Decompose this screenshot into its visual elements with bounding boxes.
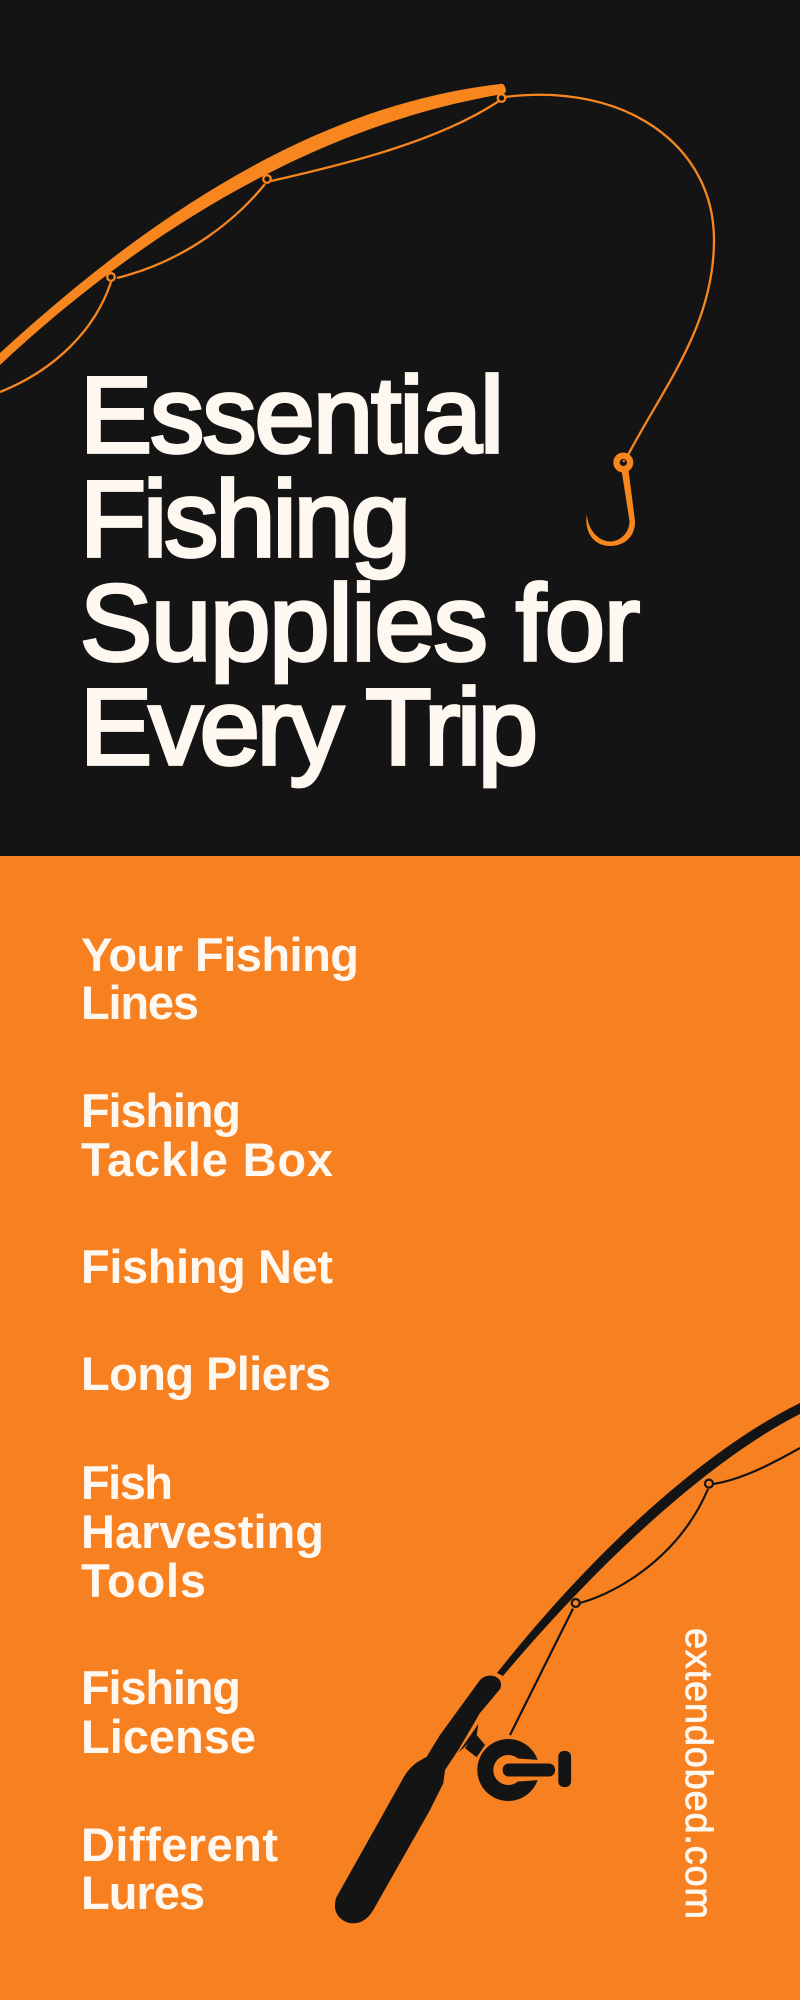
title: Every Trip	[80, 666, 538, 787]
fishing line through guides	[0, 94, 714, 455]
reel	[458, 1724, 571, 1801]
list item: different lures	[81, 1818, 278, 1919]
list item: fishing tackle box: Tackle Box	[81, 1133, 333, 1186]
list item: fishing tackle box	[81, 1084, 333, 1186]
rod shaft	[497, 1403, 800, 1676]
list item: fishing net: Fishing Net	[81, 1240, 333, 1293]
website url: extendobed.com	[677, 1628, 719, 1919]
list item: fish harvesting tools: Tools	[81, 1554, 206, 1607]
rod tip	[0, 84, 506, 365]
rod handle	[335, 1676, 501, 1923]
list item: fish harvesting tools: Harvesting	[81, 1505, 324, 1558]
list item: different lures: Lures	[81, 1866, 205, 1919]
title	[80, 354, 640, 787]
hook	[586, 452, 635, 546]
title: Supplies for	[80, 562, 640, 683]
list item: fishing license: Fishing	[81, 1661, 241, 1714]
list item: fish harvesting tools: Fish	[81, 1456, 173, 1509]
list item: fishing tackle box: Fishing	[81, 1084, 241, 1137]
list item: long pliers: Long Pliers	[81, 1347, 331, 1400]
list item: your fishing lines: Lines	[81, 976, 199, 1029]
panel: dark header background	[0, 0, 800, 856]
title: Fishing	[80, 458, 411, 579]
icon: orange fishing rod with line and hook	[0, 84, 714, 546]
fishing line to reel and guides	[510, 1448, 800, 1735]
panel: orange list background	[0, 856, 800, 2000]
title: Essential	[80, 354, 504, 475]
list item: your fishing lines	[81, 928, 359, 1029]
list item: fishing license: License	[81, 1710, 256, 1763]
icon: black fishing rod with reel	[335, 1403, 800, 1923]
list item: your fishing lines: Your Fishing	[81, 928, 359, 981]
list item: fishing license	[81, 1661, 256, 1763]
list item: fish harvesting tools	[81, 1456, 324, 1607]
list item: different lures: Different	[81, 1818, 278, 1871]
